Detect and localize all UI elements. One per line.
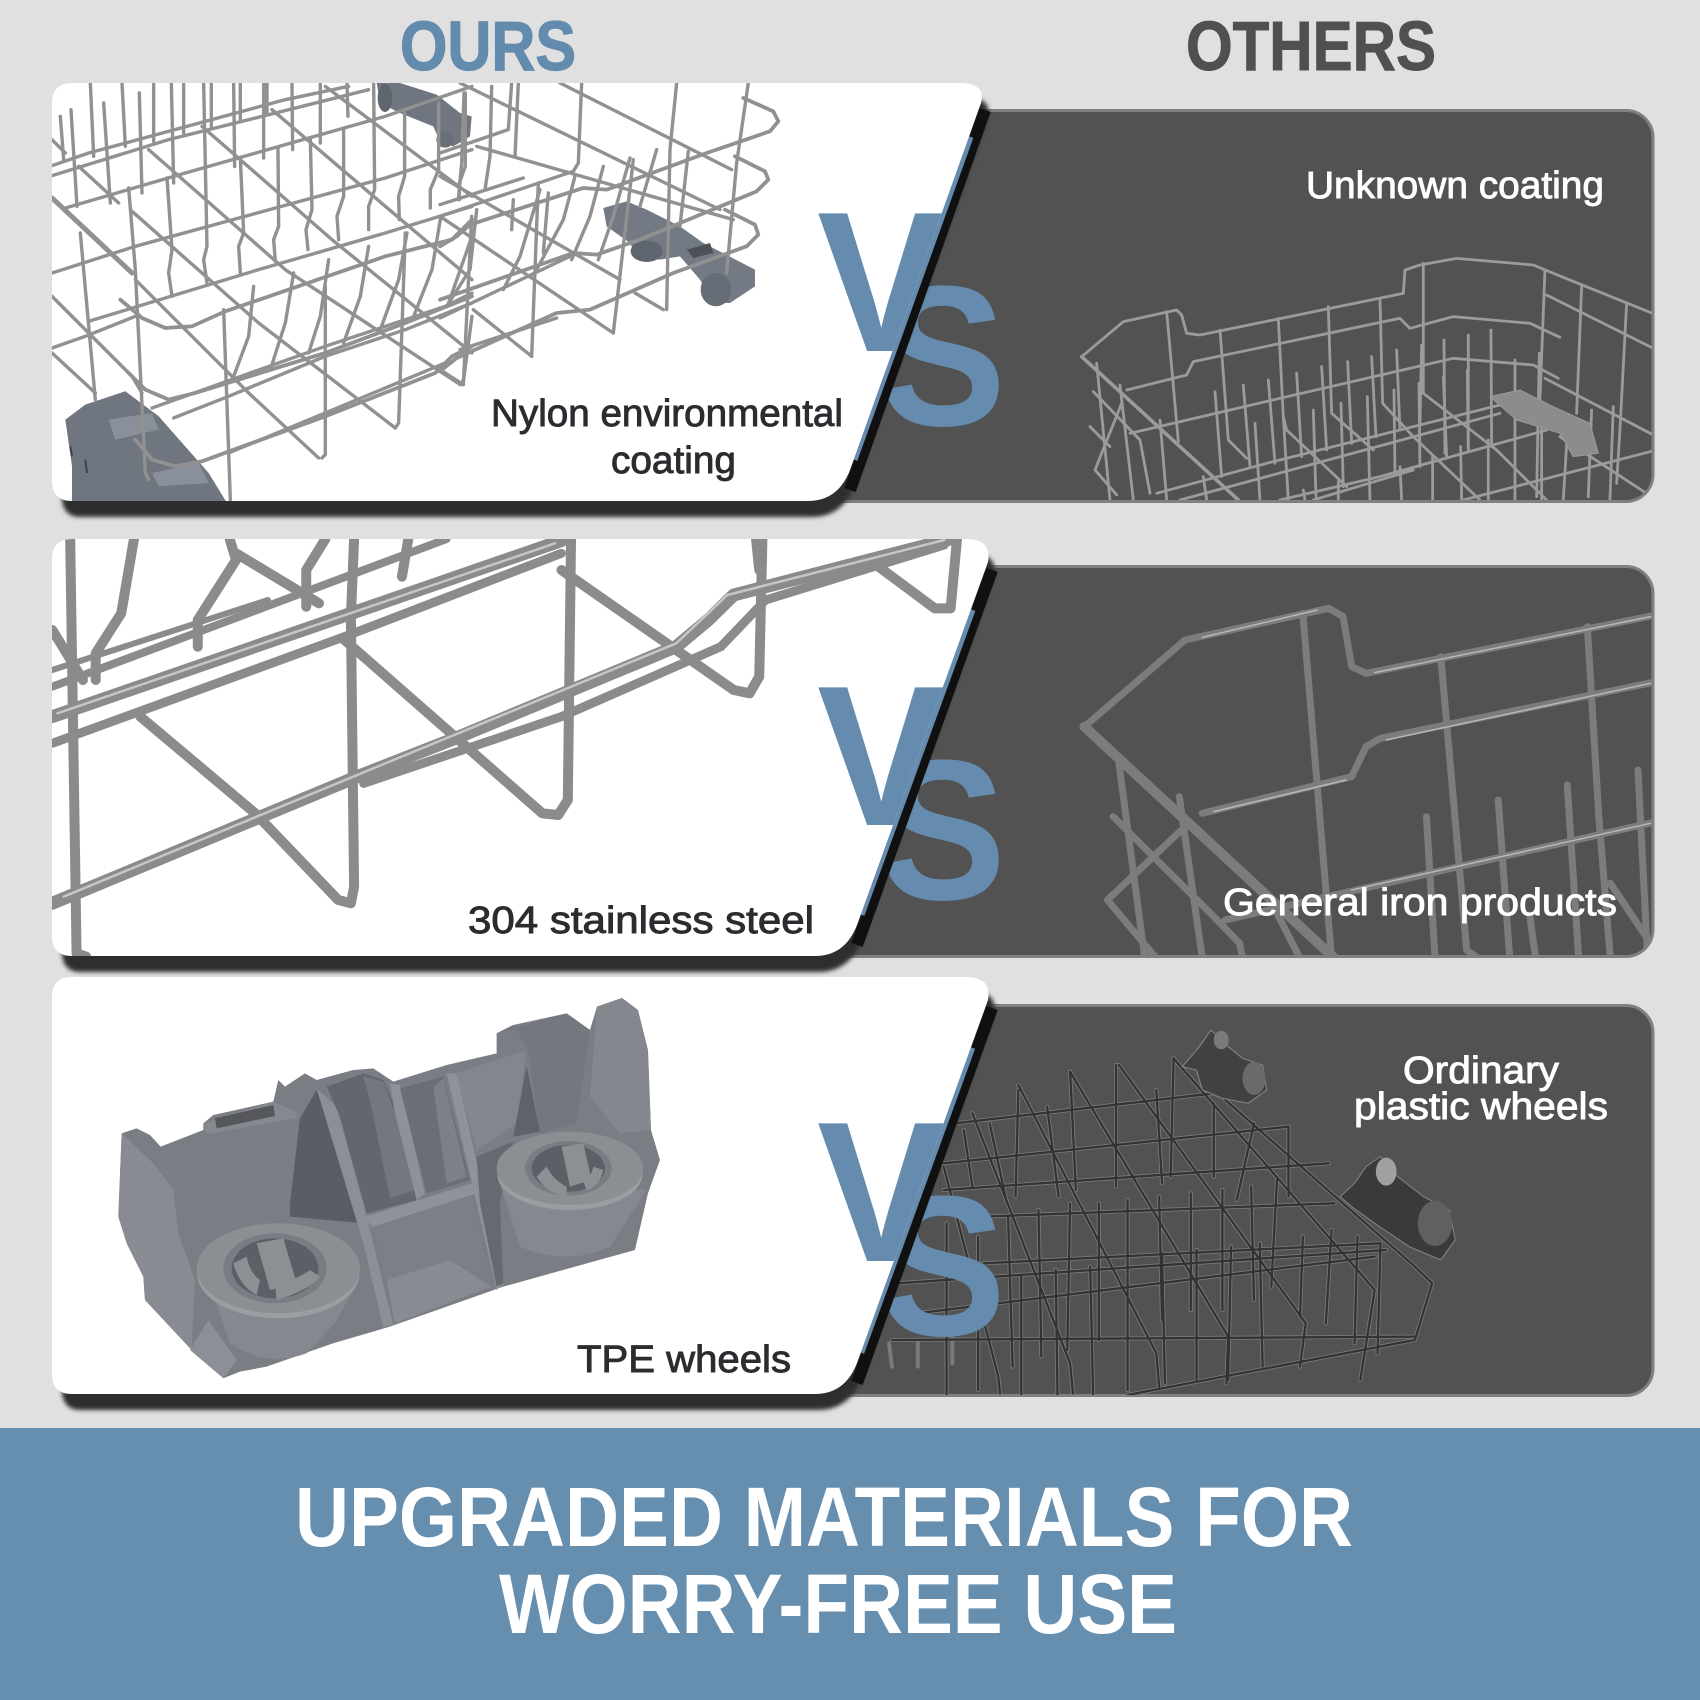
blue edge stripe [862, 1048, 973, 1353]
icon: plastic wheel upper [1182, 1030, 1267, 1103]
label: nylon coating: coating [611, 440, 736, 482]
card shadow [62, 553, 994, 972]
slanted dark edge [857, 1008, 992, 1383]
slanted dark edge [857, 570, 992, 945]
card shadow [62, 991, 994, 1410]
label: nylon coating [491, 393, 843, 482]
product: TPE wheel bracket [118, 998, 660, 1378]
icon: wheel left [197, 1223, 360, 1359]
slanted dark edge [850, 110, 985, 490]
panel: others row 3 [846, 1004, 1654, 1397]
banner headline [295, 1470, 1353, 1651]
wire rack: others plastic wheels [889, 1058, 1432, 1395]
VS letter S row 1: S [880, 245, 1006, 468]
panel: others row 1 [840, 109, 1654, 503]
heading: others: OTHERS [1186, 7, 1436, 85]
icon: plastic wheel lower [1340, 1157, 1455, 1260]
panel: ours row 3 [52, 977, 994, 1410]
white card [52, 539, 989, 956]
panel: others row 2 [848, 565, 1654, 958]
banner [0, 1428, 1700, 1700]
heading: ours: OURS [400, 7, 576, 85]
card shadow [62, 97, 989, 517]
VS letter V row 2: V [817, 645, 945, 868]
panel: ours row 1 [52, 83, 989, 517]
white card [52, 977, 989, 1394]
wire rack: others iron [1084, 608, 1656, 958]
banner headline: UPGRADED MATERIALS FOR [295, 1470, 1353, 1564]
VS letter V row 3: V [817, 1081, 945, 1304]
panel: ours row 2 [52, 539, 994, 972]
white card [52, 83, 982, 501]
label: ordinary plastic wheels: plastic wheels [1354, 1086, 1608, 1128]
icon: rack wheel top [377, 83, 472, 148]
banner headline: WORRY-FREE USE [499, 1557, 1177, 1651]
icon: wheel right [497, 1132, 647, 1257]
label: nylon coating: Nylon environmental [491, 393, 843, 435]
label: ordinary plastic wheels: Ordinary [1403, 1050, 1559, 1092]
blue edge stripe [855, 137, 971, 460]
VS letter V row 1: V [817, 171, 945, 394]
wire rack: ours steel closeup [52, 539, 957, 957]
label: 304 stainless steel: 304 stainless steel [468, 900, 814, 942]
label: ordinary plastic wheels [1354, 1050, 1608, 1128]
icon: rack base block [65, 391, 227, 503]
icon: rack wheel middle [603, 201, 755, 306]
wire rack: others coating [1082, 258, 1657, 500]
VS letter S row 3: S [880, 1155, 1006, 1378]
label: general iron products: General iron products [1223, 882, 1617, 924]
wire rack: ours coating [52, 83, 778, 503]
label: TPE wheels: TPE wheels [577, 1339, 791, 1381]
blue edge stripe [862, 610, 973, 915]
VS letter S row 2: S [880, 719, 1006, 942]
label: unknown coating: Unknown coating [1306, 165, 1604, 207]
